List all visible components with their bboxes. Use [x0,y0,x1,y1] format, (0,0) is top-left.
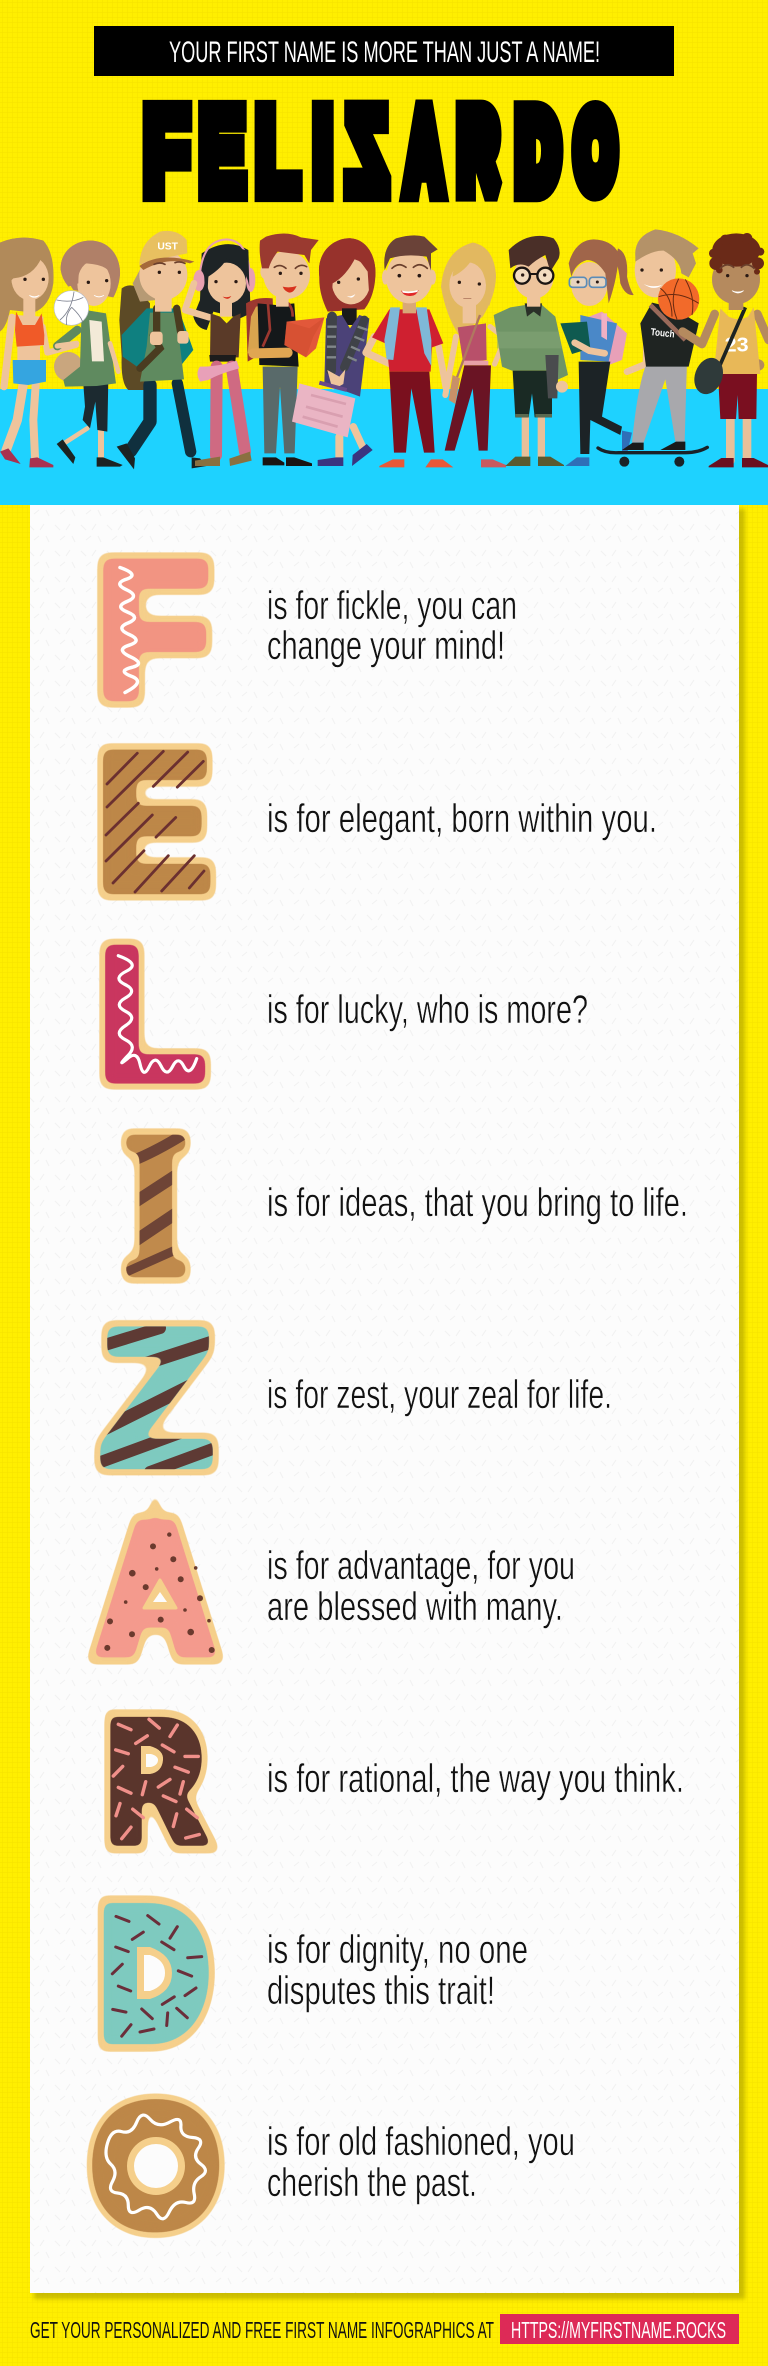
person: girl with volleyball in green jacket [54,241,123,467]
person: boy with glasses in green sweater [494,236,568,466]
person: boy in red tee with blue backpack straps [366,235,453,467]
row O: cookie letter: O [89,2067,223,2266]
shadow under panel [34,509,745,2299]
title: name FELIZARDO: O [576,93,615,210]
row D: cookie letter: D [102,1873,207,2073]
row L: cookie letter: L [97,908,207,1121]
students nine to twelve [494,229,768,467]
row O: cookie letter: O [89,2067,223,2266]
row A: cookie letter: A [103,1493,209,1683]
row O: text: cherish the past. [267,2161,477,2205]
row I: cookie letter: I [124,1092,188,1318]
person: girl with ponytail, glasses, book and pink backpack [560,239,634,466]
row I: cookie letter [120,1128,191,1284]
row F: cookie letter: F [95,520,211,739]
row O: text: is for old fashioned, you [267,2120,575,2164]
title: name FELIZARDO: E [199,83,245,218]
row A: text: are blessed with many. [267,1585,563,1629]
row A: text [267,1544,575,1629]
row R: cookie letter: R [108,1689,203,1873]
title: name FELIZARDO: Z [347,87,387,217]
title: name FELIZARDO [144,83,615,219]
person: boy on skateboard holding basketball: Touch [650,327,675,340]
row L: text: is for lucky, who is more? [267,988,588,1032]
row Z: cookie letter [94,1320,220,1476]
title: name FELIZARDO: F [144,84,189,219]
banner: tagline [94,26,674,76]
person: girl in striped sweater with pink bag [292,238,375,466]
row A: cookie letter: A [103,1493,209,1683]
title: name FELIZARDO: L [256,83,299,218]
person: girl in orange top [0,238,76,467]
title: name FELIZARDO: R [458,88,498,214]
person: girl with headphones and pink trousers [185,239,255,466]
person: boy with cap and backpack [117,231,207,469]
person: boy with red-brown hair reading a book [246,233,324,466]
panel: white letter list [30,505,739,2293]
row E: cookie letter: E [95,711,214,932]
row D: cookie letter: D [102,1873,207,2073]
person: boy with cap and backpack: UST [157,241,178,252]
person: curly-haired boy in yellow tank with satchel [683,233,768,467]
blue floor band [0,389,768,505]
person: curly-haired boy in yellow tank with satchel: 23 [725,334,749,357]
title: name FELIZARDO: A [406,91,442,213]
title: name FELIZARDO: I [313,84,333,219]
row Z: text: is for zest, your zeal for life. [267,1373,612,1417]
row F: text: is for fickle, you can [267,584,517,628]
row F: cookie letter: F [95,520,211,739]
illustration: group of students [0,229,768,469]
row E: cookie letter: E [95,711,214,932]
row D: text: disputes this trait! [267,1969,495,2013]
row F: text: change your mind! [267,624,505,668]
row I: cookie letter: I [124,1092,188,1318]
row O: text [267,2120,575,2205]
row L: cookie letter: L [97,908,207,1121]
row A: text: is for advantage, for you [267,1544,575,1588]
row Z: cookie letter: Z [99,1288,214,1507]
row F: text [267,584,517,668]
person: boy on skateboard holding basketball [598,229,707,467]
row D: text [267,1928,528,2013]
row R: cookie letter: R [108,1689,203,1873]
students one to four [0,231,255,469]
title: name FELIZARDO: D [517,89,559,213]
students five to eight [246,233,506,467]
person: blonde girl in pink top [441,243,506,467]
row D: text: is for dignity, no one [267,1928,528,1972]
row Z: cookie letter: Z [99,1288,214,1507]
